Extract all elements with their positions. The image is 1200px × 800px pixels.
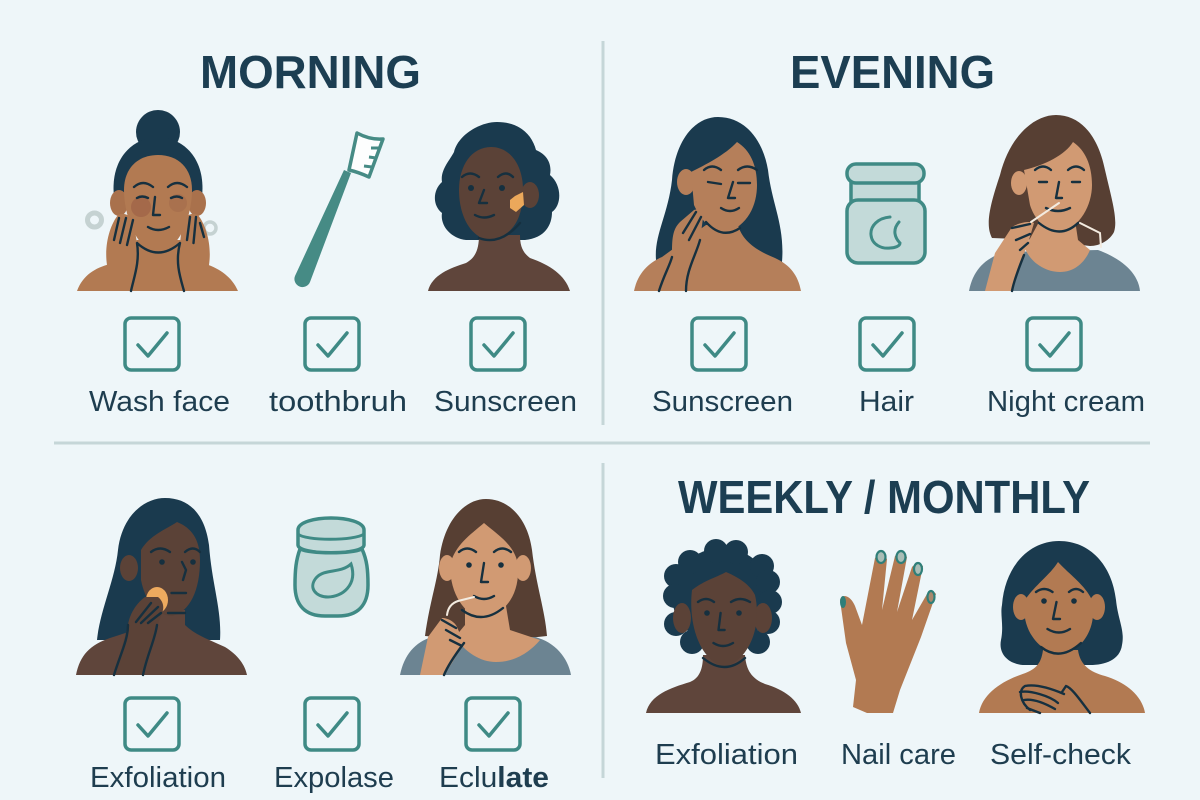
icon: woman washing face — [77, 110, 238, 291]
icon: hand with painted nails — [840, 551, 936, 713]
label: sunscreen: Sunscreen — [434, 386, 577, 418]
icon: woman with curly hair — [646, 539, 801, 713]
heading: morning: MORNING — [200, 46, 421, 98]
label: sunscreen: Sunscreen — [652, 386, 793, 418]
checkbox: eclulate — [466, 698, 520, 750]
checkbox: exfoliation — [125, 698, 179, 750]
checkbox: hair — [860, 318, 914, 370]
icon: night cream jar — [847, 164, 925, 263]
label: exfoliation: Exfoliation — [655, 739, 798, 771]
icon: woman doing self-check — [979, 541, 1145, 713]
checkbox: night cream — [1027, 318, 1081, 370]
label: exfoliation: Exfoliation — [90, 762, 226, 794]
icon: woman flossing — [969, 115, 1140, 291]
label: night cream: Night cream — [987, 386, 1145, 418]
checkbox: sunscreen — [692, 318, 746, 370]
checkbox: toothbrush — [305, 318, 359, 370]
label: expolase: Expolase — [274, 762, 394, 794]
icon: woman touching cheek — [634, 117, 801, 291]
icon: woman applying sunscreen — [428, 122, 570, 291]
label: toothbrush: toothbruh — [269, 386, 407, 418]
label: hair: Hair — [859, 386, 914, 418]
panel: morning — [77, 46, 577, 418]
label: wash face: Wash face — [89, 386, 230, 418]
panel: evening — [634, 46, 1145, 418]
checkbox: expolase — [305, 698, 359, 750]
icon: woman with floss — [400, 499, 571, 675]
panel: exfoliation routine — [76, 498, 571, 794]
label: nail care: Nail care — [841, 739, 956, 771]
icon: toothbrush — [294, 133, 383, 287]
heading: evening: EVENING — [790, 46, 995, 98]
heading: weekly / monthly: WEEKLY / MONTHLY — [678, 471, 1090, 523]
label: self-check: Self-check — [990, 739, 1132, 771]
icon: woman with sponge — [76, 498, 247, 675]
checkbox: wash face — [125, 318, 179, 370]
icon: exfoliant jar — [295, 518, 368, 616]
panel: weekly / monthly — [646, 471, 1145, 771]
checkbox: sunscreen — [471, 318, 525, 370]
label: eclulate: Eclulate — [439, 762, 549, 794]
